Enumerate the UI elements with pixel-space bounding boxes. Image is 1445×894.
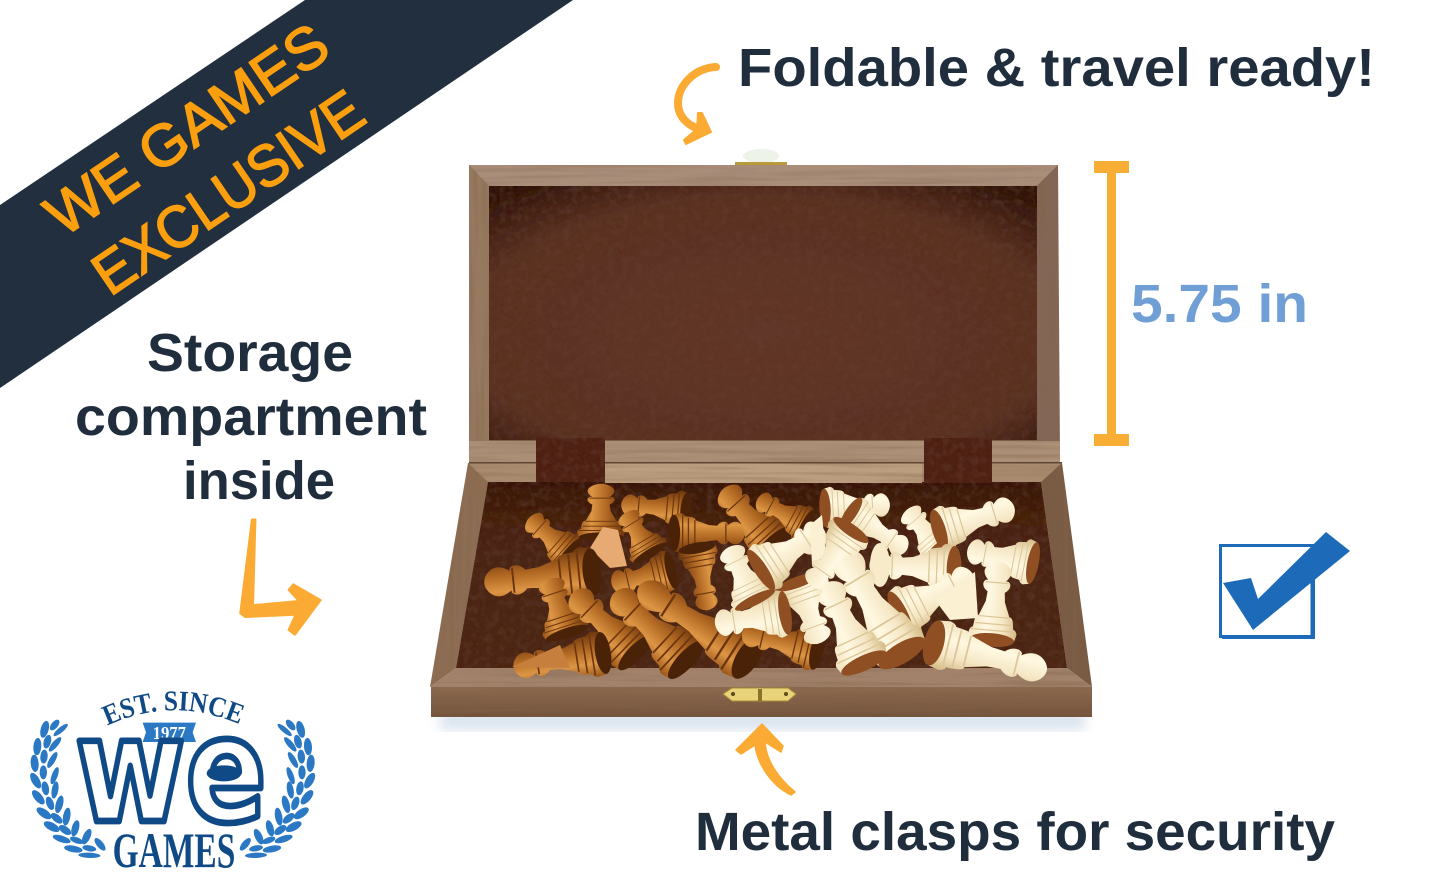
hinge strap left xyxy=(536,438,605,482)
lid xyxy=(469,165,1060,462)
heading: metal clasps for security: Metal clasps for security xyxy=(695,802,1335,862)
storage line 3: inside xyxy=(183,451,335,511)
storage line 1: Storage xyxy=(147,323,353,383)
banner text line 1: WE GAMES xyxy=(33,10,341,249)
tray strip xyxy=(605,463,922,483)
dimension label: 5.75 in xyxy=(1131,274,1308,334)
tray front face xyxy=(431,687,1092,717)
dimension bar: 5.75 in height xyxy=(1094,161,1129,446)
WE wordmark: we xyxy=(75,685,267,856)
games wordmark: GAMES xyxy=(113,822,235,878)
box shadow xyxy=(440,712,1085,730)
chess box xyxy=(430,149,1092,730)
tray xyxy=(430,462,1092,717)
heading: foldable and travel ready: Foldable & travel ready! xyxy=(738,38,1375,98)
light chess pieces xyxy=(708,484,1053,695)
logo: WE Games est. 1977 xyxy=(30,685,316,878)
tray front bevel xyxy=(430,668,1092,687)
1977 ribbon xyxy=(143,723,196,743)
banner text line 2: EXCLUSIVE xyxy=(80,77,376,308)
lid felt lining xyxy=(489,186,1037,440)
top clasp xyxy=(735,149,787,165)
icon: blue checkmark xyxy=(1220,532,1350,638)
ribbon year: 1977 xyxy=(153,723,186,743)
dark chess pieces xyxy=(482,472,828,690)
hinge strap right xyxy=(924,438,992,483)
front clasp xyxy=(723,688,796,701)
laurel right xyxy=(238,718,317,858)
storage line 2: compartment xyxy=(75,387,427,447)
wordmark e counter xyxy=(207,765,241,781)
est. since arc text: EST. SINCE xyxy=(100,691,244,726)
tray felt lining xyxy=(456,482,1067,668)
heading: storage compartment inside xyxy=(75,323,427,511)
laurel left xyxy=(28,718,107,858)
lid hinge strip xyxy=(469,441,1060,462)
banner: WE Games exclusive xyxy=(0,0,573,388)
arrow: to storage tray xyxy=(240,519,321,635)
arrow: to front clasp xyxy=(736,724,795,795)
arrow: to top of box xyxy=(678,67,716,144)
